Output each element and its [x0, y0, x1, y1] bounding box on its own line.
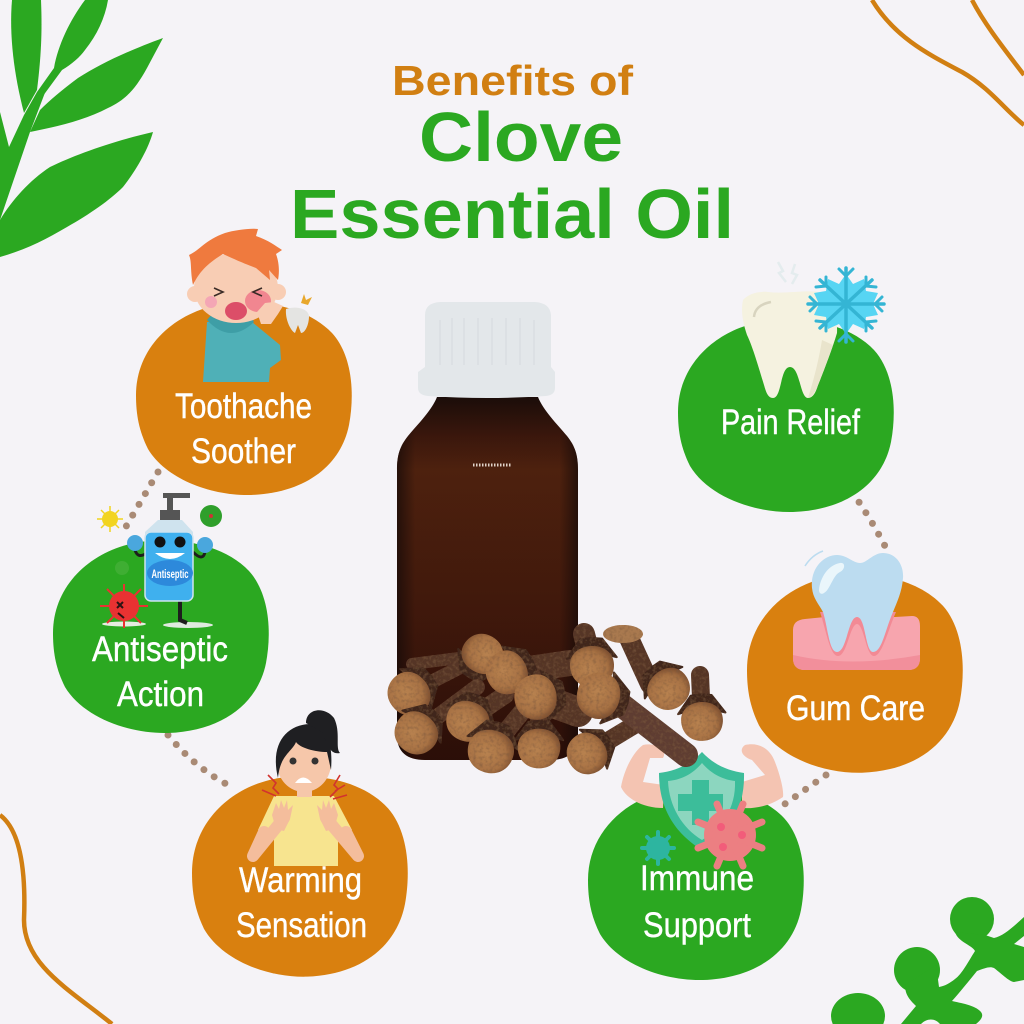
- panel: warming sensation: [192, 710, 408, 977]
- title: Clove: [419, 98, 623, 176]
- decorative curve: bottom left: [0, 815, 112, 1024]
- label: immune support: Immune: [640, 859, 754, 898]
- icon: woman feeling warm: [253, 710, 358, 866]
- panel: immune support: [588, 744, 804, 980]
- icon: antiseptic bottle character: [97, 493, 222, 628]
- bottle: [397, 302, 578, 760]
- label: warming sensation: [236, 861, 367, 945]
- panel: gum care: [747, 551, 963, 773]
- icon: muscles, shield and virus: [621, 744, 783, 866]
- clove buds pile: [377, 625, 726, 784]
- icon: tooth with snowflake: [742, 262, 884, 398]
- label: immune support: Support: [643, 906, 751, 945]
- title: Benefits of: [392, 57, 634, 104]
- label: warming sensation: Sensation: [236, 906, 367, 945]
- label: antiseptic action: [92, 630, 228, 714]
- label: toothache soother: [175, 387, 312, 471]
- panel: toothache soother: [136, 229, 352, 495]
- panel: pain relief: [678, 262, 894, 512]
- label: warming sensation: Warming: [239, 861, 362, 900]
- label: gum care: Gum Care: [786, 689, 925, 728]
- decorative leaves: top left: [0, 0, 163, 257]
- label: toothache soother: Toothache: [175, 387, 312, 426]
- icon: antiseptic bottle character: Antiseptic: [152, 567, 189, 581]
- label: immune support: [640, 859, 754, 945]
- title: [290, 57, 734, 253]
- panel: antiseptic action: [53, 493, 269, 733]
- decorative curves: top right: [872, 0, 1024, 125]
- label: antiseptic action: Action: [117, 675, 204, 714]
- title: Essential Oil: [290, 175, 734, 253]
- label: antiseptic action: Antiseptic: [92, 630, 228, 669]
- bottle cap: [418, 302, 555, 398]
- icon: tooth and gum: [793, 551, 920, 670]
- decorative leaves: bottom right: [831, 897, 1024, 1024]
- label: toothache soother: Soother: [191, 432, 296, 471]
- label: pain relief: Pain Relief: [721, 403, 860, 442]
- dotted connectors: [124, 472, 888, 806]
- icon: boy with toothache: [187, 229, 312, 382]
